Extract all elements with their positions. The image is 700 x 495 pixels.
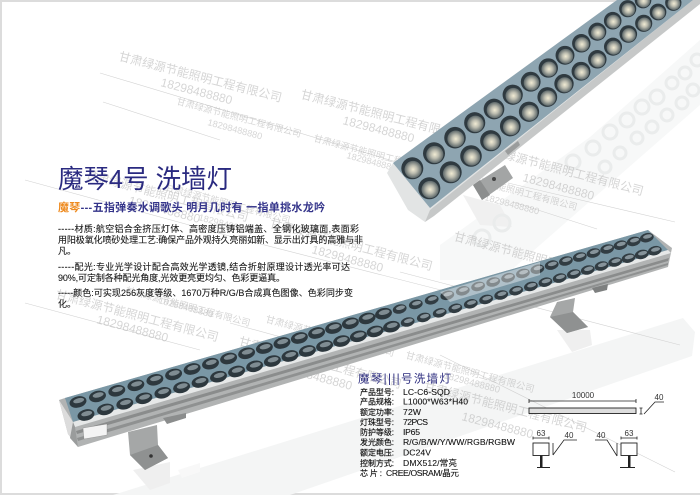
watermark: company name and phone, repeated: 甘肃绿源节能照明工程有限公司 xyxy=(175,95,303,139)
specification list: 芯片: xyxy=(360,468,382,478)
watermark: company name and phone, repeated: 18298488880 xyxy=(279,360,354,393)
specification list: 72W xyxy=(403,407,422,417)
description: colour xyxy=(58,287,353,309)
dimension drawing: left end view: 63 xyxy=(537,429,546,438)
watermark: company name and phone, repeated: 18298488880 xyxy=(442,370,501,396)
specification list: 额定电压: xyxy=(360,448,394,458)
dimension drawing: left end view xyxy=(533,429,577,468)
watermark: company name and phone, repeated: 18298488880 xyxy=(345,150,402,174)
watermark: company name and phone, repeated: 甘肃绿源节能照明工程有限公司 xyxy=(237,333,403,391)
watermark: company name and phone, repeated: 18298488880 xyxy=(521,170,596,203)
description: optics: 90%,可定制各种配光角度,光效更亮更均匀、色彩更逼真。 xyxy=(58,272,285,283)
product label sticker xyxy=(83,424,107,439)
description: material: -----材质:航空铝合金挤压灯体、高密度压铸铝端盖、全钢化玻璃面,表面彩 xyxy=(58,223,359,234)
watermark: company name and phone, repeated: 18298488880 xyxy=(483,192,540,216)
watermark: company name and phone, repeated: 甘肃绿源节能照明工程有限公司 xyxy=(268,215,434,273)
specification list: 产品规格: xyxy=(360,396,394,406)
description: material: 凡。 xyxy=(58,246,76,256)
watermark: company name and phone, repeated: 18298488880 xyxy=(299,334,358,360)
description: colour: 化。 xyxy=(58,298,76,309)
dimension drawing: right end view: 63 xyxy=(625,429,634,438)
watermark: company name and phone, repeated: 甘肃绿源节能照明工程有限公司 xyxy=(422,378,589,435)
watermark: company name and phone, repeated: 18298488880 xyxy=(197,212,254,236)
watermark: company name and phone, repeated: 18298488880 xyxy=(341,113,416,145)
watermark: company name and phone, repeated: 18298488880 xyxy=(460,409,535,441)
dimension drawing: front view: 10000 xyxy=(572,391,595,400)
description: optics: -----配光:专业光学设计配合高效光学透镜,结合折射原理设计透光率可达 xyxy=(58,261,350,272)
watermark: company name and phone, repeated: 甘肃绿源节能照明工程有限公司 xyxy=(451,168,579,212)
faint reflection of lower lamp xyxy=(113,318,695,495)
description: optics xyxy=(58,261,350,283)
specification list: 控制方式: xyxy=(360,458,394,468)
watermark: company name and phone, repeated: 甘肃绿源节能照明工程有限公司 xyxy=(124,284,252,328)
watermark: company name and phone, repeated: 甘肃绿源节能照明工程有限公司 xyxy=(117,48,284,105)
specification list: 产品型号: xyxy=(360,387,394,397)
description: material: 用阳极氧化喷砂处理工艺:确保产品外观持久亮丽如新、显示出灯具的高雅与非 xyxy=(58,234,363,245)
watermark: company name and phone, repeated: 甘肃绿源节能照明工程有限公司 xyxy=(452,228,618,286)
specification list: 发光颜色: xyxy=(360,437,394,447)
watermark: company name and phone, repeated: 甘肃绿源节能照明工程有限公司 xyxy=(164,181,292,225)
spec heading: 魔琴||||号洗墙灯 xyxy=(358,372,452,386)
specification list xyxy=(360,387,516,478)
faint reflection of upper lamp xyxy=(440,40,700,280)
watermark: company name and phone, repeated: 18298488880 xyxy=(157,295,214,319)
specification list: 灯珠型号: xyxy=(360,417,394,427)
watermark: company name and phone, repeated: 甘肃绿源节能照明工程有限公司 xyxy=(264,313,396,359)
specification list: CREE/OSRAM/晶元 xyxy=(386,468,459,478)
specification list: L1000*W63*H40 xyxy=(403,396,468,406)
specification list: IP65 xyxy=(403,427,420,437)
lower lamp full view xyxy=(59,230,672,470)
watermark: company name and phone, repeated: 甘肃绿源节能照明工程有限公司 xyxy=(84,166,250,224)
description: material xyxy=(58,223,363,256)
dimension drawing: front view xyxy=(529,391,664,414)
watermark: company name and phone, repeated: 18298488880 xyxy=(310,242,385,275)
specification list: R/G/B/W/Y/WW/RGB/RGBW xyxy=(403,437,516,447)
watermark: company name and phone, repeated: 甘肃绿源节能照明工程有限公司 xyxy=(404,349,536,395)
dimension drawing: front view: 40 xyxy=(655,393,664,402)
watermark: company name and phone, repeated: 18298488880 xyxy=(127,193,202,226)
watermark: company name and phone, repeated: 甘肃绿源节能照明工程有限公司 xyxy=(312,132,440,176)
watermark: company name and phone, repeated: 18298488880 xyxy=(95,312,170,345)
upper lamp close-up xyxy=(387,0,700,222)
subtitle slogan: 魔琴---五指弹奏水调歌头 明月几时有 一指单挑水龙吟 xyxy=(58,200,325,214)
watermark: company name and phone, repeated: 甘肃绿源节能照明工程有限公司 xyxy=(479,140,645,198)
watermark: company name and phone, repeated: 18298488880 xyxy=(159,75,234,107)
specification list: 防护等级: xyxy=(360,427,394,437)
title: 魔琴4号 洗墙灯 xyxy=(58,164,232,194)
dimension drawing: right end view xyxy=(595,429,637,468)
specification list: 72PCS xyxy=(403,417,428,427)
specification list: DMX512/常亮 xyxy=(403,457,457,468)
dimension drawing: left end view: 40 xyxy=(565,431,574,440)
watermark: company name and phone, repeated: 甘肃绿源节能照明工程有限公司 xyxy=(54,286,220,344)
specification list: DC24V xyxy=(403,448,431,458)
watermark: company name and phone, repeated: 甘肃绿源节能照明工程有限公司 xyxy=(299,86,466,143)
dimension drawing: right end view: 40 xyxy=(597,431,606,440)
specification list: 额定功率: xyxy=(360,407,394,417)
watermark: company name and phone, repeated: 18298488880 xyxy=(206,117,263,141)
specification list: LC-C6-SQD xyxy=(403,387,450,397)
description: colour: -----颜色:可实现256灰度等级、1670万种R/G/B合成真色图像、色彩同步变 xyxy=(58,287,353,298)
